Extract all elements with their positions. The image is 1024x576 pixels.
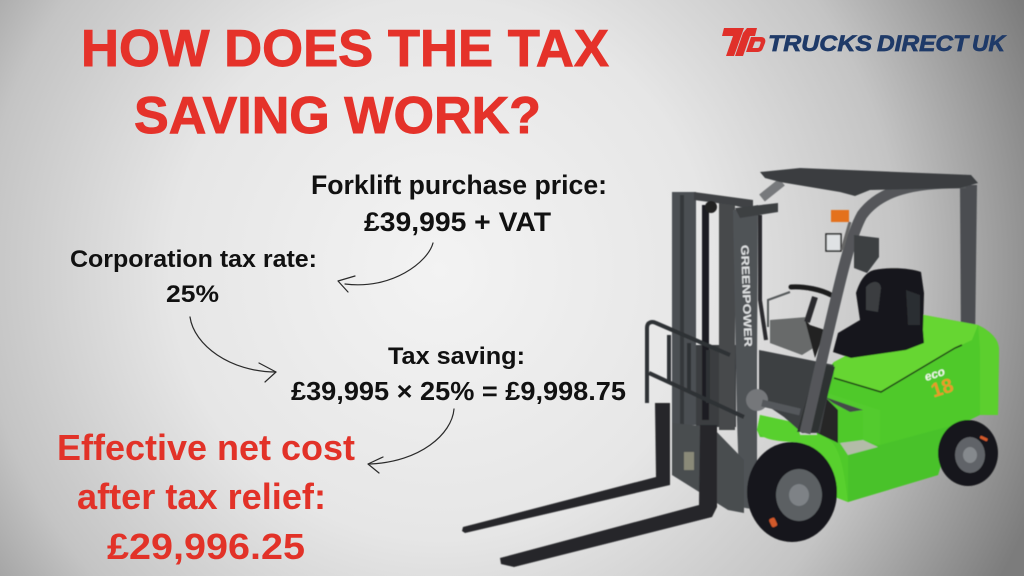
text block: corporation tax rate: 25% [166,281,219,308]
title [81,20,609,145]
seat [833,268,924,358]
green body [757,315,999,502]
logo wordmark: TRUCKS [768,31,872,56]
eco 18 badge: eco [923,364,947,384]
text block: forklift purchase price [311,170,607,237]
mirror and beacon [826,210,879,273]
text block: corporation tax rate: Corporation tax rate: [70,246,317,273]
dash panel [759,350,834,433]
text block: forklift purchase price: £39,995 + VAT [364,207,551,237]
title: HOW DOES THE TAX [81,20,609,78]
logo wordmark: UK [972,31,1007,56]
front tyre [747,442,837,542]
bottle, console and steering [768,287,831,358]
fender [757,415,848,502]
mast [672,192,778,510]
text block: tax saving: Tax saving: [388,343,525,370]
footwell recess [817,397,838,443]
roof strut [762,182,782,198]
arrow: price to tax rate [338,243,433,292]
load guard [647,322,744,417]
arrow: saving to net cost [368,409,454,473]
logo wordmark: DIRECT [877,31,970,56]
title: SAVING WORK? [134,87,541,145]
forklift illustration [462,168,999,567]
text block: tax saving [291,343,626,406]
arrow: tax rate to saving [190,317,276,382]
rear tyre [938,420,998,486]
text block: effective net cost [57,427,355,567]
eco 18 badge [923,363,956,403]
text block: tax saving: £39,995 × 25% = £9,998.75 [291,376,626,406]
logo: Trucks Direct UK [722,28,1007,56]
lower body shade [848,425,954,502]
pillar plate [797,363,835,432]
eco 18 badge: 18 [928,375,956,402]
carriage [672,423,744,513]
right fork [500,425,717,567]
text block: effective net cost: Effective net cost [57,427,355,468]
mast label: GREENPOWER [738,245,754,347]
text block: corporation tax rate [70,246,317,308]
front pillar [805,183,966,433]
icon: TD mark [722,28,765,56]
hood top [834,315,978,392]
text block: effective net cost: £29,996.25 [107,526,305,567]
logo wordmark [768,31,1007,56]
tilt cylinder [746,389,800,412]
overhead guard [760,168,978,196]
rear panel [978,325,999,415]
text block: forklift purchase price: Forklift purchase price: [311,170,607,200]
text block: effective net cost: after tax relief: [77,476,326,517]
left fork [462,403,670,533]
rear pillar [960,185,977,347]
